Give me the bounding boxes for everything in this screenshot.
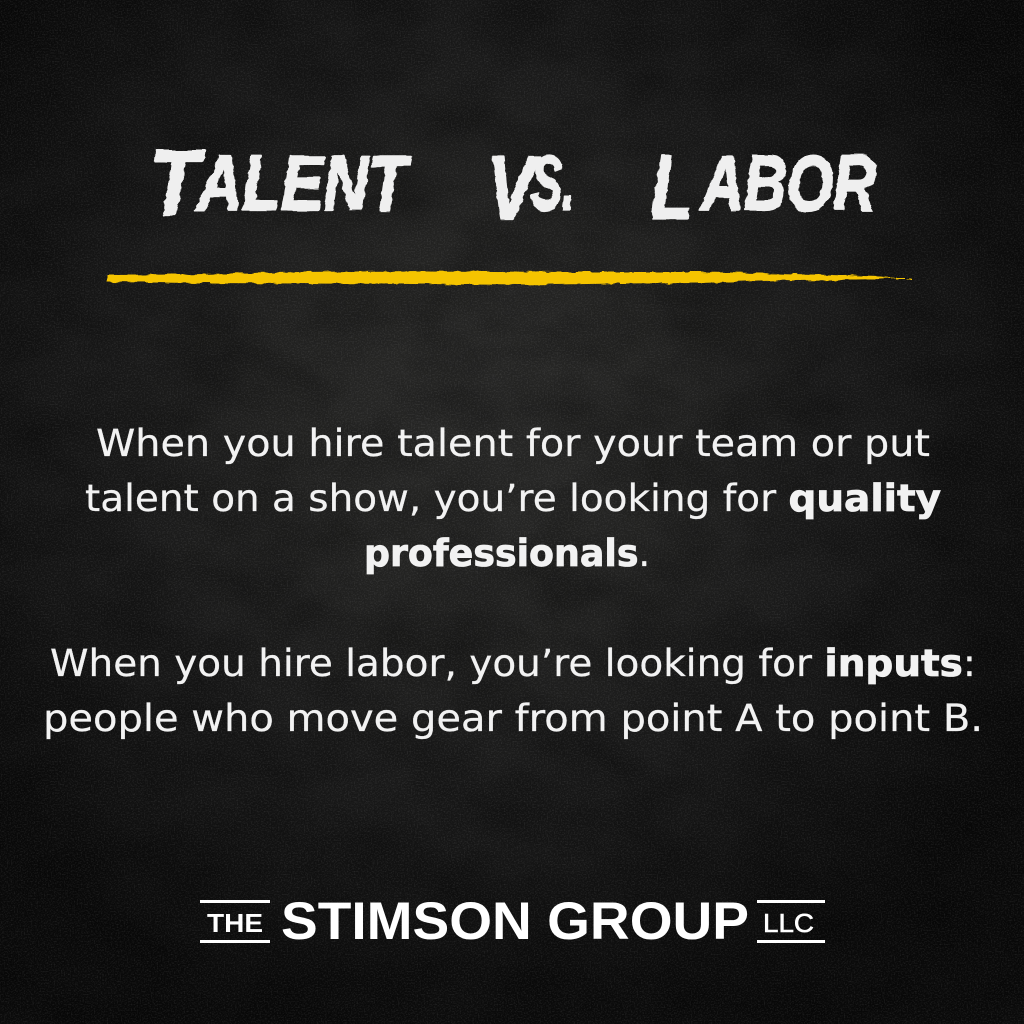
title: V bbox=[487, 139, 541, 239]
title: L bbox=[651, 137, 693, 239]
paragraph: labor: When you hire labor, you’re looking for inputs: bbox=[50, 642, 976, 685]
logo: The Stimson Group LLC: THE bbox=[207, 908, 263, 938]
logo: The Stimson Group LLC: STIMSON GROUP bbox=[281, 892, 749, 951]
title: ABOR bbox=[699, 139, 876, 227]
title: T bbox=[149, 130, 206, 235]
yellow brush underline bbox=[107, 271, 912, 285]
paragraph: talent bbox=[85, 422, 941, 575]
title: ALENT bbox=[195, 139, 412, 227]
paragraph: talent: When you hire talent for your team or put bbox=[96, 422, 930, 465]
paragraph: talent: talent on a show, you’re looking for quality bbox=[85, 477, 941, 520]
logo: The Stimson Group LLC: LLC bbox=[763, 908, 814, 938]
body text bbox=[43, 422, 983, 740]
paragraph: labor: people who move gear from point A to point B. bbox=[43, 697, 983, 740]
title: S. bbox=[531, 141, 575, 226]
title bbox=[149, 130, 876, 239]
paragraph: talent: professionals. bbox=[364, 532, 650, 575]
paragraph: labor bbox=[43, 642, 983, 740]
